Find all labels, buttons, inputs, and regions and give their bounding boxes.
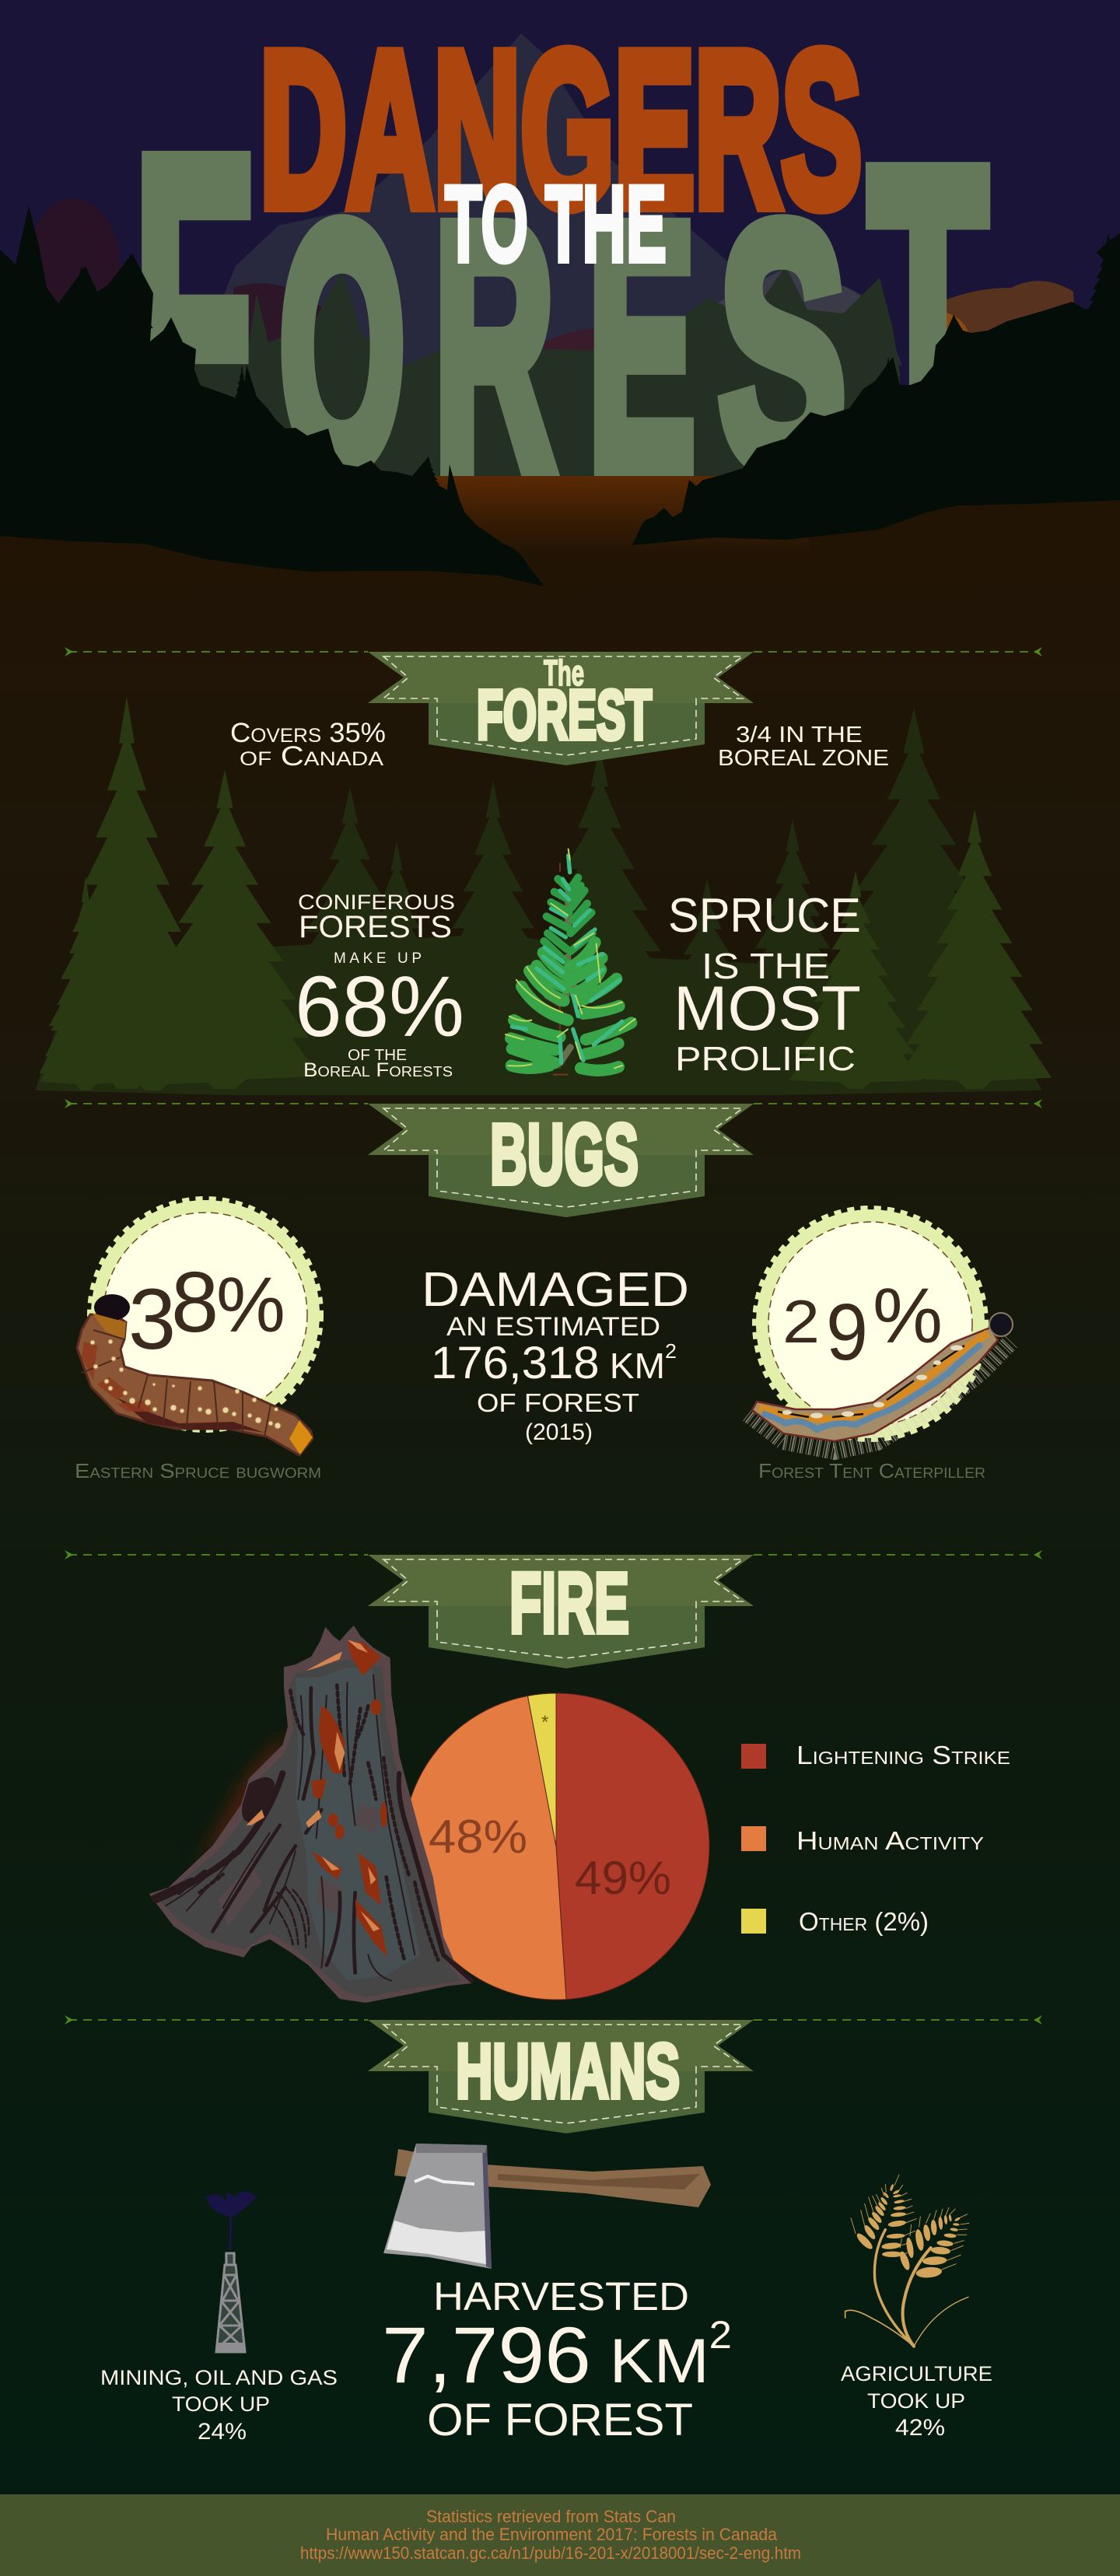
title word: FOREST: R: [434, 153, 555, 540]
stat: coniferous forests 68%: Boreal Forests: [303, 1059, 453, 1081]
divider: Fire: [65, 1550, 1042, 1559]
legend: human activity: Human Activity: [796, 1826, 984, 1855]
stat: mining, oil and gas 24%: MINING, OIL AND GAS: [100, 2366, 338, 2389]
stat: agriculture 42%: TOOK UP: [867, 2389, 965, 2413]
divider: Bugs: [65, 1099, 1042, 1108]
title word: FOREST: F: [133, 65, 254, 560]
stat: agriculture 42%: [841, 2362, 992, 2441]
pie chart: wildfire causes: 48%: [429, 1811, 527, 1863]
title words: TO THE: TO THE: [445, 163, 667, 285]
section heading: The Forest: [368, 652, 754, 765]
stat: agriculture 42%: AGRICULTURE: [841, 2362, 992, 2385]
stat: spruce is the most prolific: [668, 889, 861, 1078]
icon: spruce budworm caterpillar: [77, 1294, 313, 1455]
pie chart: wildfire causes: 49%: [575, 1852, 671, 1904]
section heading: Humans: HUMANS: [456, 2028, 680, 2114]
icon: forest tent caterpillar: [748, 1313, 1013, 1451]
stat: coniferous forests 68%: CONIFEROUS: [298, 891, 455, 914]
icon: wheat: [845, 2175, 969, 2347]
fact: covers 35% of Canada: of Canada: [240, 741, 383, 772]
hero: left foreground tree silhouette: [0, 206, 544, 586]
fact: covers 35% of Canada: Covers 35%: [230, 718, 386, 748]
pie chart: wildfire causes: *: [541, 1712, 548, 1733]
page background: [0, 476, 1120, 2504]
stat: coniferous forests 68%: MAKE UP: [334, 950, 422, 967]
stat: spruce is the most prolific: SPRUCE: [668, 889, 861, 943]
fact: covers 35% of Canada: [230, 718, 386, 772]
stat: coniferous forests 68%: [295, 891, 464, 1081]
divider: Humans: [65, 2015, 1042, 2025]
hero illustration: night sky, mountain and glow: [0, 0, 1120, 556]
stat: damaged an estimated 176,318 km2 of forest (2015): 2: [665, 1339, 677, 1363]
title word: FOREST: S: [719, 153, 846, 540]
pie chart: wildfire causes: [403, 1693, 709, 2000]
badge: 29%: 2: [782, 1287, 820, 1356]
stat: harvested 7,796 km2 of forest: [382, 2274, 732, 2445]
stat: mining, oil and gas 24%: TOOK UP: [172, 2392, 270, 2416]
stat: spruce is the most prolific: PROLIFIC: [675, 1040, 856, 1078]
section heading: Bugs: [368, 1104, 754, 1217]
stat: damaged an estimated 176,318 km2 of forest (2015): OF FOREST: [477, 1388, 639, 1417]
stat: damaged an estimated 176,318 km2 of forest (2015): [422, 1263, 689, 1445]
stat: damaged an estimated 176,318 km2 of forest (2015): AN ESTIMATED: [446, 1312, 660, 1342]
badge: 38%: 3: [128, 1272, 176, 1367]
footer: sources: [300, 2507, 801, 2563]
legend: lightening strike: Lightening Strike: [796, 1741, 1010, 1769]
fact: 3/4 in the boreal zone: [718, 723, 889, 771]
badge: 38%: 8: [171, 1255, 219, 1350]
stat: damaged an estimated 176,318 km2 of forest (2015): 176,318 KM: [431, 1338, 663, 1388]
badge: 29%: [756, 1209, 985, 1438]
title word: FOREST: E: [588, 153, 695, 540]
stat: mining, oil and gas 24%: [100, 2366, 338, 2445]
label: Forest Tent Caterpiller: Forest Tent Caterpiller: [758, 1459, 985, 1482]
icon: oil rig with plume: [206, 2192, 257, 2352]
badge: 38%: [91, 1200, 320, 1429]
badge: 29%: %: [873, 1272, 943, 1360]
stat: spruce is the most prolific: MOST: [674, 974, 861, 1044]
divider: The Forest: [65, 647, 1042, 656]
footer: sources: Statistics retrieved from Stats Can: [426, 2507, 676, 2526]
section heading: Bugs: BUGS: [490, 1107, 639, 1202]
legend: human activity: [741, 1826, 984, 1855]
fact: 3/4 in the boreal zone: 3/4 IN THE: [736, 723, 863, 747]
section heading: The Forest: The: [544, 653, 584, 693]
label: Eastern Spruce budworm: Eastern Spruce bugworm: [75, 1459, 321, 1482]
footer: sources: Human Activity and the Environment 2017: Forests in Canada: [326, 2525, 778, 2544]
stat: spruce is the most prolific: IS THE: [702, 946, 830, 986]
title word: FOREST: O: [279, 153, 405, 540]
icon: spruce tree: [506, 849, 635, 1075]
section heading: Fire: [368, 1555, 754, 1668]
background forest: [35, 696, 1052, 1095]
section heading: Humans: [368, 2020, 754, 2133]
legend: other: [741, 1907, 929, 1936]
stat: damaged an estimated 176,318 km2 of forest (2015): DAMAGED: [422, 1263, 689, 1317]
stat: agriculture 42%: 42%: [895, 2415, 945, 2441]
stat: coniferous forests 68%: 68%: [295, 959, 464, 1055]
stat: coniferous forests 68%: OF THE: [348, 1047, 407, 1064]
stat: coniferous forests 68%: FORESTS: [299, 910, 452, 944]
stat: harvested 7,796 km2 of forest: HARVESTED: [433, 2274, 689, 2319]
hero: right foreground tree silhouette: [632, 233, 1120, 545]
icon: axe: [383, 2144, 711, 2269]
title word: FOREST: [133, 65, 988, 560]
badge: 38%: %: [216, 1262, 285, 1349]
footer: sources: https://www150.statcan.gc.ca/n1/pub/16-201-x/2018001/sec-2-eng.htm: [300, 2543, 801, 2563]
badge: 29%: 9: [826, 1287, 868, 1377]
stat: mining, oil and gas 24%: 24%: [198, 2419, 247, 2445]
stat: harvested 7,796 km2 of forest: 2: [709, 2313, 732, 2357]
section heading: The Forest: FOREST: [477, 677, 652, 754]
footer band: [0, 2494, 1120, 2576]
fact: 3/4 in the boreal zone: BOREAL ZONE: [718, 746, 889, 771]
legend: other: Other (2%): [799, 1907, 929, 1936]
section heading: Fire: FIRE: [509, 1556, 629, 1651]
stat: harvested 7,796 km2 of forest: OF FOREST: [427, 2395, 693, 2445]
stat: harvested 7,796 km2 of forest: 7,796 KM: [382, 2311, 703, 2399]
stat: damaged an estimated 176,318 km2 of forest (2015): (2015): [525, 1419, 593, 1445]
illustration: burnt tree stump: [149, 1626, 472, 2003]
